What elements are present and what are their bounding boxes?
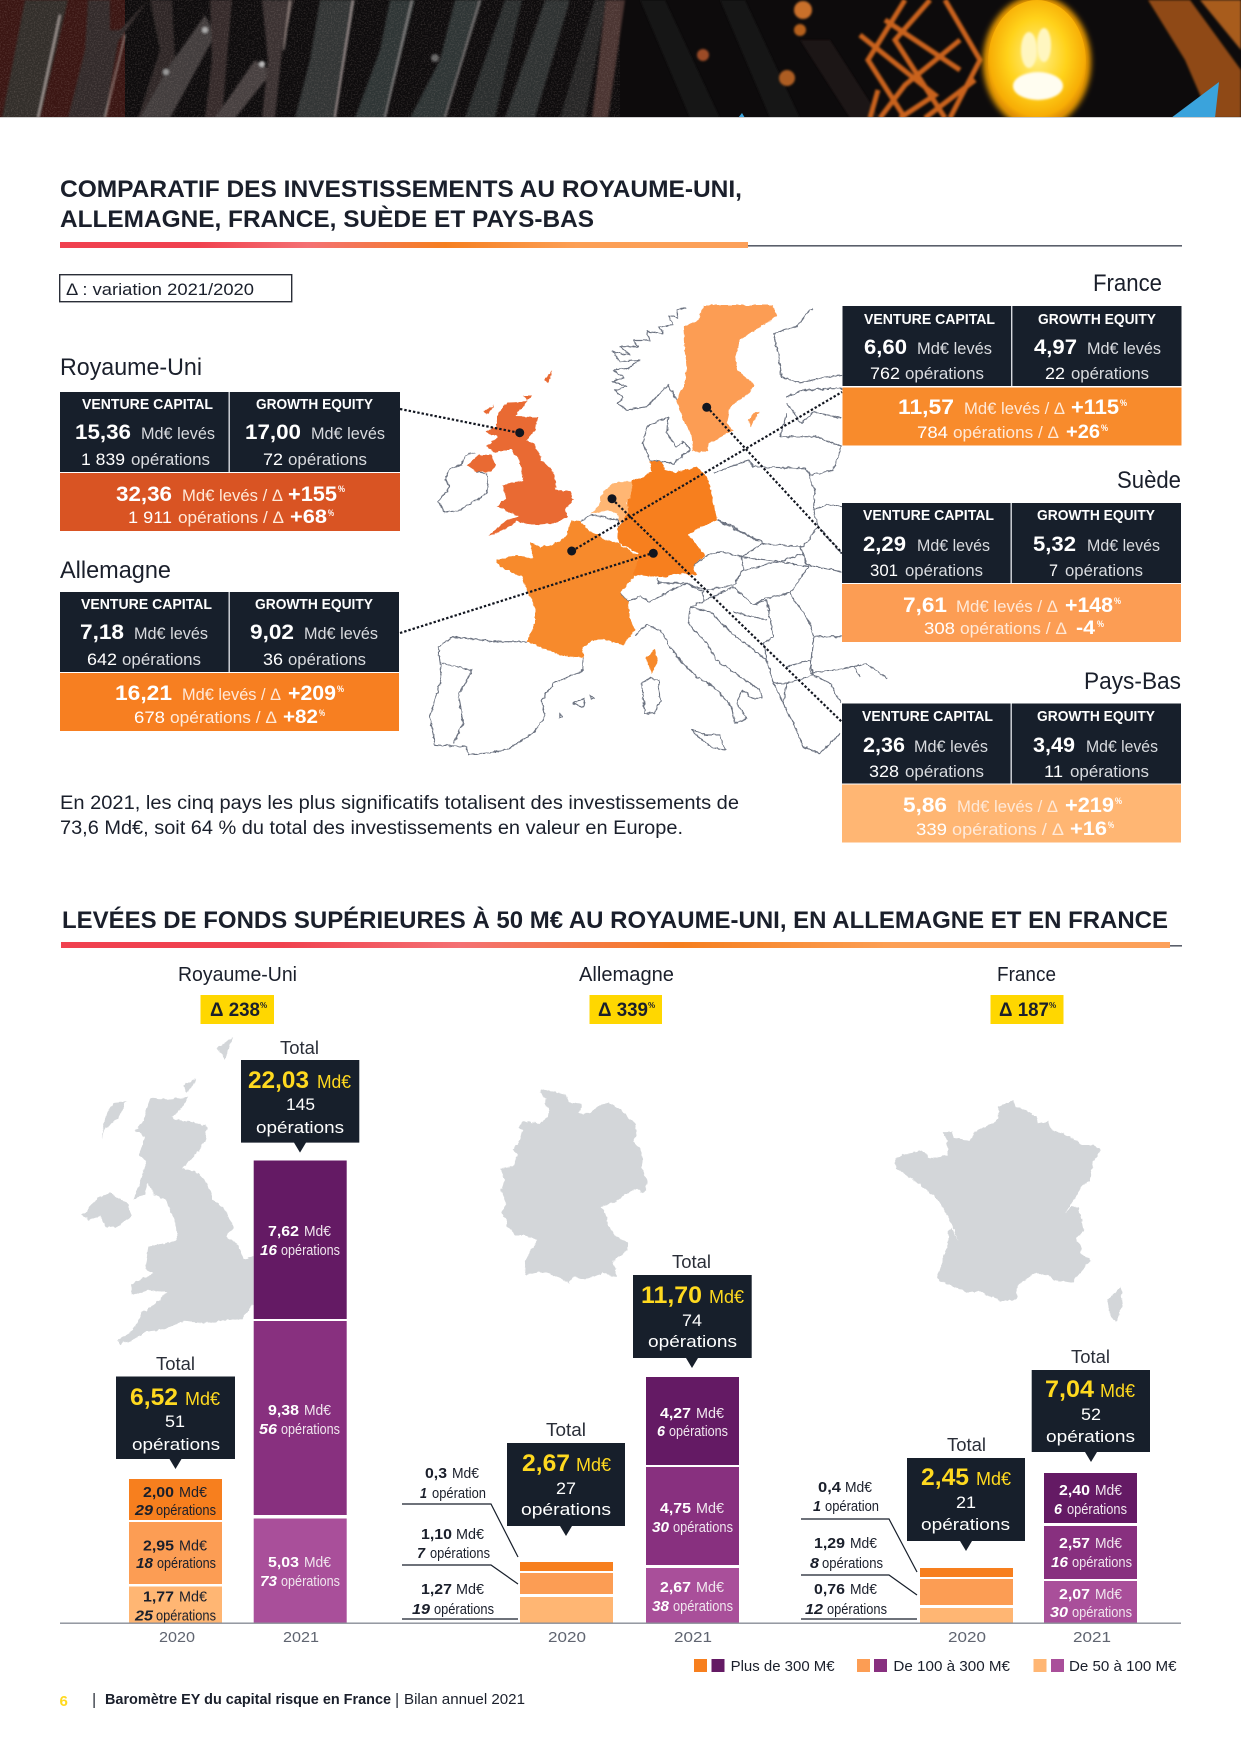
chart: Royaume-Uni 2020: opérations	[156, 1608, 216, 1624]
callout: Royaume-Uni 2021 total: 145	[286, 1095, 315, 1114]
callout: Royaume-Uni 2021 total: 22,03	[248, 1067, 309, 1094]
callout: Allemagne 2020 total: 27	[556, 1479, 576, 1498]
section heading: comparatif: ALLEMAGNE, FRANCE, SUÈDE ET PAYS-BAS	[60, 205, 594, 233]
panel: Suède: 5,32	[1033, 533, 1076, 556]
panel: Royaume-Uni: %	[338, 484, 345, 494]
panel: Pays-Bas: Pays-Bas	[1084, 668, 1181, 695]
labels: France 2020 segments: 0,4	[818, 1479, 842, 1496]
chart legend	[694, 1658, 1177, 1675]
summary paragraph	[60, 793, 739, 839]
Germany	[617, 461, 717, 577]
silhouette: France	[895, 1100, 1123, 1323]
panel: Pays-Bas: +16	[1070, 819, 1107, 840]
panel: Allemagne: 678	[134, 708, 165, 727]
labels: Allemagne 2020 segments: 19	[412, 1601, 431, 1618]
callout: Royaume-Uni 2021 total	[241, 1038, 359, 1153]
panel: Allemagne: Md€ levés / Δ	[182, 685, 281, 704]
labels: Allemagne 2020 segments: 1,10	[421, 1526, 452, 1543]
panel: Allemagne: +82	[283, 707, 318, 728]
chart: Royaume-Uni 2021: Md€	[304, 1403, 331, 1419]
panel: Suède: 308	[924, 619, 955, 638]
callout: France 2020 total: Total	[947, 1435, 986, 1455]
panel: Allemagne: opérations / Δ	[170, 708, 277, 727]
chart legend: Plus de 300 M€	[731, 1658, 835, 1675]
country label and badge: Royaume-Uni: %	[260, 1001, 267, 1010]
labels: Allemagne 2020 segments: 1,27	[421, 1581, 452, 1598]
callout: Allemagne 2020 total: opérations	[521, 1500, 611, 1519]
panel: Pays-Bas: GROWTH EQUITY	[1037, 708, 1155, 725]
callout: Allemagne 2021 total	[633, 1252, 752, 1368]
panel: Pays-Bas: 11	[1044, 762, 1063, 781]
labels: Allemagne 2020 segments: opérations	[430, 1546, 490, 1562]
labels: France 2020 segments: Md€	[850, 1536, 877, 1552]
chart: France 2021: 2,40	[1059, 1482, 1090, 1499]
callout: Allemagne 2020 total: 2,67	[522, 1450, 570, 1477]
callout: France 2020 total: Md€	[976, 1469, 1011, 1489]
panel: Suède: Md€ levés / Δ	[956, 597, 1058, 616]
chart: France 2021: 30	[1050, 1604, 1069, 1621]
callout: France 2021 total	[1032, 1347, 1150, 1462]
Sweden	[677, 305, 777, 452]
chart: Allemagne 2021: 4,27	[660, 1405, 691, 1422]
chart legend: De 50 à 100 M€	[1069, 1658, 1177, 1675]
chart: Allemagne 2021: 38	[652, 1598, 670, 1615]
panel: France: 784	[917, 423, 948, 442]
chart: Allemagne 2021: 6	[657, 1423, 666, 1440]
axis and year labels: 2020	[159, 1629, 195, 1646]
panel: Royaume-Uni: 17,00	[245, 421, 301, 444]
panel: Allemagne: Allemagne	[60, 557, 171, 584]
chart: France 2021: Md€	[1095, 1587, 1122, 1603]
page footer: Baromètre EY du capital risque en France	[105, 1692, 391, 1708]
panel: Pays-Bas: +219	[1065, 794, 1114, 817]
callout: France 2020 total: 2,45	[921, 1464, 969, 1491]
countries outline	[430, 307, 887, 754]
chart: France 2021: Md€	[1095, 1483, 1122, 1499]
panel: Royaume-Uni: 72	[263, 450, 283, 469]
callout: Allemagne 2021 total: Md€	[709, 1287, 744, 1307]
country label and badge: Royaume-Uni	[178, 964, 297, 1024]
chart: Royaume-Uni 2020: 25	[134, 1608, 154, 1624]
chart: Allemagne 2021	[646, 1377, 739, 1623]
panel: Royaume-Uni: 15,36	[75, 421, 131, 444]
labels: France 2020 segments: 0,76	[814, 1581, 845, 1598]
panel: France: %	[1120, 398, 1127, 408]
chart: Allemagne 2020	[520, 1562, 613, 1623]
panel: France: 6,60	[864, 336, 907, 359]
panel: Pays-Bas: 5,86	[903, 794, 947, 817]
chart: France 2021: 16	[1051, 1554, 1069, 1571]
panel: Royaume-Uni: 1 911	[128, 508, 172, 527]
section heading: comparatif	[60, 176, 1182, 248]
panel: Royaume-Uni	[60, 354, 400, 531]
section heading: levées de fonds: LEVÉES DE FONDS SUPÉRIEURES À 50 M€ AU ROYAUME-UNI, EN ALLEMAGNE ET EN FRANCE	[62, 906, 1168, 934]
callout: France 2020 total: 21	[956, 1493, 976, 1512]
panel: Royaume-Uni: +155	[288, 483, 337, 506]
chart: Royaume-Uni 2021: opérations	[281, 1574, 340, 1590]
panel: France: +26	[1066, 422, 1100, 443]
panel: Pays-Bas: 3,49	[1033, 734, 1075, 757]
callout: France 2021 total: Total	[1071, 1347, 1110, 1367]
labels: Allemagne 2020 segments: 7	[417, 1545, 426, 1562]
labels: Allemagne 2020 segments: 1	[420, 1485, 427, 1502]
panel: Suède: 2,29	[863, 533, 906, 556]
labels: France 2020 segments: opération	[825, 1499, 879, 1515]
panel: Royaume-Uni: Md€ levés	[141, 424, 215, 443]
panel: France: VENTURE CAPITAL	[864, 311, 995, 328]
country label and badge: Allemagne: Δ 339	[598, 1000, 648, 1021]
panel: Suède: Md€ levés	[917, 536, 990, 555]
chart: Allemagne 2021: 30	[652, 1519, 670, 1536]
europe map	[430, 305, 887, 754]
country label and badge: Royaume-Uni: Δ 238	[210, 1000, 260, 1021]
axis and year labels: 2021	[674, 1629, 712, 1646]
panel: Allemagne: %	[319, 708, 325, 718]
panel: Pays-Bas	[842, 668, 1181, 842]
chart: Royaume-Uni 2020: Md€	[179, 1538, 207, 1554]
section heading: levées de fonds	[61, 906, 1182, 948]
panel: Royaume-Uni: Md€ levés / Δ	[182, 486, 283, 505]
panel: Suède: opérations / Δ	[960, 619, 1067, 638]
chart: Royaume-Uni 2020: 18	[136, 1555, 154, 1572]
labels: France 2020 segments: Md€	[845, 1480, 872, 1496]
panel: Allemagne: %	[337, 684, 344, 694]
panel: Allemagne: 9,02	[250, 621, 294, 644]
panel: Suède: %	[1114, 596, 1121, 606]
chart: Royaume-Uni 2020: 2,95	[143, 1538, 174, 1554]
panel: Suède: opérations	[1065, 561, 1143, 580]
chart: France 2021: opérations	[1072, 1555, 1132, 1571]
chart: Royaume-Uni 2021: 7,62	[268, 1223, 299, 1240]
chart: Royaume-Uni 2021: 5,03	[268, 1554, 299, 1571]
chart: Royaume-Uni 2021: Md€	[304, 1555, 331, 1571]
labels: France 2020 segments: 8	[810, 1555, 820, 1572]
panel: France: Md€ levés / Δ	[964, 399, 1065, 418]
panel: France: 4,97	[1034, 336, 1077, 359]
panel: Royaume-Uni: %	[328, 508, 334, 518]
hero photo banner	[0, 0, 1241, 128]
axis and year labels: 2020	[548, 1629, 586, 1646]
callout: Allemagne 2021 total: opérations	[648, 1332, 737, 1351]
callout: Allemagne 2020 total	[507, 1420, 625, 1536]
country label and badge: France: Δ 187	[999, 1000, 1049, 1021]
panel: Pays-Bas: opérations	[905, 762, 984, 781]
chart: Royaume-Uni 2021: opérations	[281, 1422, 340, 1438]
panel: Allemagne: 7,18	[80, 621, 124, 644]
country label and badge: France	[990, 964, 1064, 1024]
panel: Royaume-Uni: opérations / Δ	[178, 508, 284, 527]
callout: Royaume-Uni 2021 total: opérations	[256, 1118, 344, 1137]
panel: Allemagne	[60, 557, 399, 731]
chart: Allemagne 2021: Md€	[696, 1580, 724, 1596]
panel: France: Md€ levés	[1087, 339, 1161, 358]
chart: Royaume-Uni 2021: 73	[260, 1573, 278, 1590]
country label and badge: Allemagne: Allemagne	[579, 964, 674, 986]
callout: Allemagne 2021 total: 11,70	[641, 1282, 702, 1309]
panel: Royaume-Uni: 1 839	[81, 450, 125, 469]
country label and badge: France: %	[1049, 1001, 1056, 1010]
panel: Royaume-Uni: 32,36	[116, 483, 172, 506]
panel: France: 22	[1045, 364, 1065, 383]
panel: Royaume-Uni: +68	[290, 507, 327, 528]
chart: Royaume-Uni 2020: Md€	[179, 1590, 207, 1606]
panel: Allemagne: +209	[288, 682, 336, 705]
labels: Allemagne 2020 segments: Md€	[452, 1466, 479, 1482]
chart: Allemagne 2021: opérations	[673, 1520, 733, 1536]
callout: Allemagne 2020 total: Total	[546, 1420, 586, 1440]
panel: France: 762	[870, 364, 900, 383]
panel: Pays-Bas: Md€ levés	[1086, 737, 1158, 756]
chart: Royaume-Uni 2021: 16	[260, 1242, 278, 1259]
country label and badge: Royaume-Uni: Royaume-Uni	[178, 964, 297, 986]
panel: Suède: opérations	[905, 561, 983, 580]
chart: Allemagne 2021: 4,75	[660, 1500, 691, 1517]
callout: Allemagne 2020 total: Md€	[576, 1455, 611, 1475]
page footer	[60, 1692, 525, 1710]
legend box: delta variation	[60, 275, 292, 302]
chart: Allemagne 2021: opérations	[673, 1599, 733, 1615]
panel: Allemagne: VENTURE CAPITAL	[81, 596, 212, 613]
panel: Royaume-Uni: Royaume-Uni	[60, 354, 202, 381]
chart: Royaume-Uni 2021	[254, 1160, 347, 1623]
callout: France 2021 total: 52	[1081, 1405, 1101, 1424]
labels: Allemagne 2020 segments: 0,3	[425, 1465, 447, 1482]
panel: Pays-Bas: 2,36	[863, 734, 905, 757]
callout: Allemagne 2021 total: Total	[672, 1252, 711, 1272]
panel: Pays-Bas: %	[1108, 820, 1114, 830]
labels: Allemagne 2020 segments	[402, 1465, 518, 1619]
chart: Royaume-Uni 2020: 1,77	[143, 1588, 174, 1606]
callout: Allemagne 2021 total: 74	[682, 1311, 702, 1330]
panel: Suède: +148	[1065, 594, 1113, 617]
panel: France: 11,57	[898, 396, 954, 419]
axis and year labels: 2020	[948, 1629, 986, 1646]
chart: France 2020	[920, 1568, 1013, 1623]
panel: Pays-Bas: opérations / Δ	[952, 820, 1064, 839]
chart: France 2021	[1044, 1473, 1137, 1623]
country label and badge: France: France	[997, 964, 1056, 986]
panel: Allemagne: Md€ levés	[304, 624, 378, 643]
axis and year labels	[60, 1622, 1181, 1646]
chart legend: De 100 à 300 M€	[893, 1658, 1011, 1675]
chart: Royaume-Uni 2021: Md€	[304, 1224, 331, 1240]
labels: France 2020 segments: Md€	[850, 1582, 877, 1598]
panel: Suède: %	[1097, 619, 1104, 629]
labels: France 2020 segments: opérations	[822, 1556, 883, 1572]
panel: Pays-Bas: 339	[916, 820, 947, 839]
panel: France: opérations	[1071, 364, 1149, 383]
country label and badge: Allemagne: %	[648, 1001, 655, 1010]
callout: Royaume-Uni 2020 total: Total	[156, 1354, 195, 1374]
panel: Suède: 301	[870, 561, 898, 580]
chart: Allemagne 2021: Md€	[696, 1406, 724, 1422]
silhouette: Germany	[500, 1089, 647, 1283]
panel: Pays-Bas: Md€ levés / Δ	[957, 797, 1058, 816]
callout: France 2021 total: Md€	[1100, 1381, 1135, 1401]
United Kingdom	[467, 370, 573, 536]
callout: France 2021 total: opérations	[1046, 1427, 1135, 1446]
callout: France 2020 total: opérations	[921, 1515, 1010, 1534]
chart: France 2021: opérations	[1072, 1605, 1132, 1621]
map leader lines and dots	[400, 392, 842, 722]
axis and year labels: 2021	[1073, 1629, 1111, 1646]
chart: Allemagne 2021: opérations	[669, 1424, 728, 1440]
legend box: delta variation: Δ : variation 2021/2020	[66, 280, 254, 299]
panel: Suède: -4	[1076, 618, 1095, 639]
callout: France 2021 total: 7,04	[1045, 1376, 1095, 1403]
callout: Royaume-Uni 2021 total: Total	[280, 1038, 319, 1058]
panel: France: +115	[1071, 396, 1119, 419]
panel: Royaume-Uni: opérations	[288, 450, 367, 469]
chart: Royaume-Uni 2021: opérations	[281, 1243, 340, 1259]
labels: Allemagne 2020 segments: opérations	[434, 1602, 494, 1618]
chart: France 2021: 6	[1054, 1501, 1063, 1518]
panel: Allemagne: GROWTH EQUITY	[255, 596, 373, 613]
chart: Royaume-Uni 2020: Md€	[179, 1485, 207, 1501]
callout: Royaume-Uni 2021 total: Md€	[317, 1072, 351, 1092]
panel: Royaume-Uni: VENTURE CAPITAL	[82, 396, 213, 413]
chart: France 2021: Md€	[1095, 1536, 1122, 1552]
panel: France	[842, 270, 1182, 446]
summary paragraph: 73,6 Md€, soit 64 % du total des investissements en valeur en Europe.	[60, 818, 683, 839]
callout: France 2020 total	[907, 1435, 1025, 1551]
page footer: Bilan annuel 2021	[404, 1692, 525, 1708]
panel: Suède: Md€ levés	[1087, 536, 1160, 555]
labels: France 2020 segments	[801, 1479, 917, 1619]
labels: Allemagne 2020 segments: Md€	[456, 1527, 484, 1543]
labels: Allemagne 2020 segments: Md€	[456, 1582, 484, 1598]
Netherlands	[590, 482, 632, 523]
labels: France 2020 segments: 1	[813, 1498, 821, 1515]
panel: Pays-Bas: VENTURE CAPITAL	[862, 708, 993, 725]
chart: France 2021: opérations	[1067, 1502, 1127, 1518]
panel: Allemagne: 16,21	[115, 682, 172, 705]
panel: Suède: 7,61	[903, 594, 947, 617]
labels: France 2020 segments: opérations	[827, 1602, 887, 1618]
labels: Allemagne 2020 segments: opération	[432, 1486, 486, 1502]
page footer: 6	[60, 1693, 68, 1710]
panel: Allemagne: opérations	[288, 650, 366, 669]
panel: France: opérations	[905, 364, 984, 383]
labels: France 2020 segments: 1,29	[814, 1535, 845, 1552]
panel: Suède: GROWTH EQUITY	[1037, 507, 1155, 524]
labels: France 2020 segments: 12	[805, 1601, 824, 1618]
chart: Royaume-Uni 2021: 9,38	[268, 1402, 299, 1419]
France	[496, 520, 658, 673]
panel: Suède	[842, 467, 1181, 642]
panel: Royaume-Uni: GROWTH EQUITY	[256, 396, 373, 413]
panel: Allemagne: Md€ levés	[134, 624, 208, 643]
axis and year labels: 2021	[283, 1629, 319, 1646]
callout: Royaume-Uni 2020 total: 51	[165, 1412, 185, 1431]
panel: France: Md€ levés	[917, 339, 992, 358]
callout: Royaume-Uni 2020 total: Md€	[185, 1389, 220, 1409]
panel: Suède: Suède	[1117, 467, 1181, 494]
panel: France: GROWTH EQUITY	[1038, 311, 1156, 328]
chart: Allemagne 2021: Md€	[696, 1501, 724, 1517]
chart: Royaume-Uni 2020	[129, 1479, 222, 1624]
callout: Royaume-Uni 2020 total: opérations	[132, 1435, 220, 1454]
chart: Royaume-Uni 2020: 2,00	[143, 1484, 174, 1501]
panel: Allemagne: 36	[263, 650, 283, 669]
callout: Royaume-Uni 2020 total	[116, 1354, 235, 1469]
chart: Allemagne 2021: 2,67	[660, 1579, 691, 1596]
panel: Suède: VENTURE CAPITAL	[863, 507, 994, 524]
panel: France: %	[1101, 423, 1108, 433]
chart: France 2021: 2,07	[1059, 1586, 1090, 1603]
country label and badge: Allemagne	[579, 964, 674, 1024]
summary paragraph: En 2021, les cinq pays les plus significatifs totalisent des investissements de	[60, 793, 739, 814]
panel: Pays-Bas: %	[1115, 796, 1122, 806]
panel: France: opérations / Δ	[953, 423, 1059, 442]
chart: France 2021: 2,57	[1059, 1535, 1090, 1552]
panel: France: France	[1093, 270, 1162, 297]
panel: Pays-Bas: opérations	[1070, 762, 1149, 781]
panel: Allemagne: 642	[87, 650, 117, 669]
section heading: comparatif: COMPARATIF DES INVESTISSEMENTS AU ROYAUME-UNI,	[60, 176, 742, 203]
panel: Pays-Bas: Md€ levés	[914, 737, 988, 756]
panel: Suède: 7	[1049, 561, 1058, 580]
chart: Royaume-Uni 2020: opérations	[156, 1503, 216, 1519]
panel: Royaume-Uni: Md€ levés	[311, 424, 385, 443]
callout: Royaume-Uni 2020 total: 6,52	[130, 1384, 178, 1411]
panel: Allemagne: opérations	[122, 650, 201, 669]
panel: Pays-Bas: 328	[869, 762, 899, 781]
panel: Royaume-Uni: opérations	[131, 450, 210, 469]
chart: Royaume-Uni 2020: opérations	[157, 1556, 216, 1572]
silhouette: UK	[82, 1037, 257, 1344]
chart: Royaume-Uni 2021: 56	[259, 1421, 278, 1438]
chart: Royaume-Uni 2020: 29	[134, 1502, 154, 1519]
